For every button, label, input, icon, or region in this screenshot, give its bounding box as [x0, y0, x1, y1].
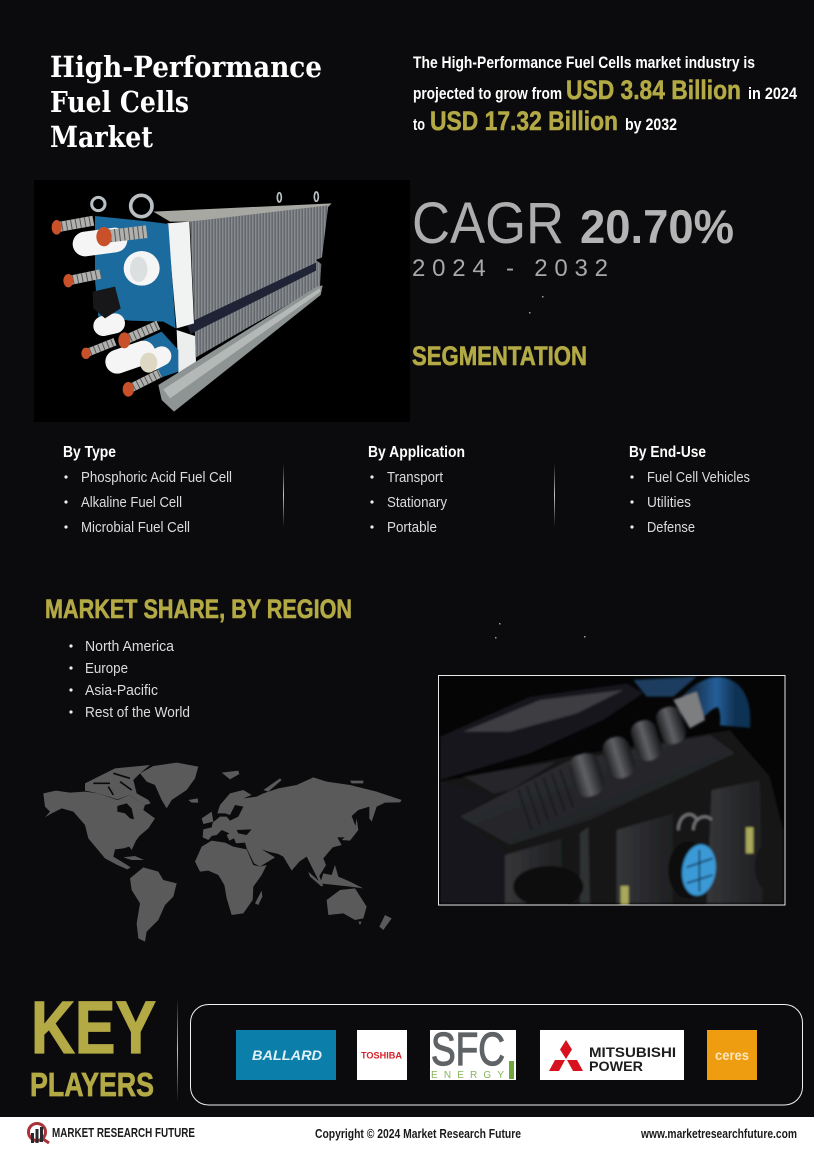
threaded rods [57, 221, 160, 389]
segment list: by end-use [629, 444, 750, 536]
africa [195, 841, 267, 915]
north america [43, 791, 155, 869]
footer: MARKET RESEARCH FUTURE [52, 1126, 195, 1140]
CAGR headline: 2024 - 2032 [412, 255, 608, 282]
logo: ballard: BALLARD [252, 1047, 322, 1063]
segment list: by type: Microbial Fuel Cell [81, 520, 190, 536]
image: fuel cell stack [34, 180, 410, 422]
CAGR headline: CAGR [412, 191, 564, 256]
region list: Rest of the World [85, 705, 190, 721]
logo: mitsubishi power: MITSUBISHI [589, 1044, 676, 1060]
segment list: by type: Phosphoric Acid Fuel Cell [81, 470, 232, 486]
segment list: by application: Transport [387, 470, 443, 486]
segment list: by application [368, 444, 465, 536]
heading: key players: KEY [31, 986, 156, 1069]
dark strap [187, 263, 316, 334]
image: fuel cell engine [438, 676, 786, 907]
world map [43, 763, 402, 942]
stack top [153, 203, 332, 222]
hose [693, 692, 735, 727]
greenland [140, 763, 198, 808]
region list: North America [85, 639, 175, 655]
base rail [158, 285, 323, 412]
upper hood [440, 683, 643, 780]
market summary text: USD 3.84 Billion [566, 75, 741, 105]
labels [746, 827, 753, 853]
iceland [222, 771, 239, 779]
segment list: by end-use: Utilities [647, 495, 691, 511]
market summary text: in 2024 [748, 85, 798, 103]
heading: key players: PLAYERS [30, 1066, 154, 1103]
title: High-Performance [50, 50, 322, 84]
arctic islands [85, 765, 151, 805]
market summary text [413, 54, 798, 136]
segment list: by type: Alkaline Fuel Cell [81, 495, 182, 511]
logo: mitsubishi power [540, 1030, 684, 1080]
lifting eyes [92, 192, 318, 217]
title [50, 50, 322, 154]
segment list: by application: By Application [368, 444, 465, 461]
blue plate [95, 216, 176, 328]
market summary text: to [413, 116, 425, 134]
segment list: by application: Portable [387, 520, 437, 536]
logo: sfc energy: SFC [431, 1023, 505, 1075]
blue cap [679, 842, 719, 898]
segment list: by end-use: By End-Use [629, 444, 706, 461]
logo: ballard [236, 1030, 336, 1080]
logo: toshiba: TOSHIBA [361, 1050, 402, 1062]
icon: market research future logo [28, 1124, 49, 1143]
islands of europe and asia [202, 812, 213, 824]
footer [0, 1117, 814, 1150]
cap and wiring [513, 866, 583, 907]
segment list: by end-use: Defense [647, 520, 695, 536]
heading: key players [30, 986, 156, 1103]
logo: ceres: ceres [715, 1048, 749, 1063]
white plates [167, 222, 194, 328]
side panels [505, 838, 563, 903]
south america [130, 867, 177, 942]
logo: toshiba [357, 1030, 407, 1080]
region list: Asia-Pacific [85, 683, 158, 699]
market summary text: The High-Performance Fuel Cells market industry is [413, 54, 755, 72]
logo: mitsubishi power: POWER [589, 1058, 643, 1074]
market summary text: by 2032 [625, 116, 677, 134]
tubes [85, 240, 162, 362]
logo: ceres [707, 1030, 757, 1080]
market summary text: projected to grow from [413, 85, 562, 103]
market summary text: USD 17.32 Billion [430, 106, 618, 136]
main body [440, 730, 783, 903]
CAGR headline: 20.70% [580, 200, 734, 253]
intake humps [566, 704, 689, 800]
eurasia [203, 777, 402, 885]
title: Market [50, 120, 154, 154]
region list [69, 639, 190, 721]
heading: market share by region: MARKET SHARE, BY REGION [45, 594, 352, 624]
black connector [93, 287, 121, 318]
specks [495, 296, 586, 638]
australia [327, 888, 367, 920]
segment list: by application: Stationary [387, 495, 448, 511]
CAGR headline [412, 191, 734, 282]
title: Fuel Cells [50, 85, 189, 119]
segment list: by type: By Type [63, 444, 116, 461]
heading: segmentation: SEGMENTATION [412, 341, 587, 371]
footer: Copyright © 2024 Market Research Future [315, 1127, 521, 1141]
cooling fins [190, 205, 328, 357]
vent ribs [518, 769, 573, 830]
region list: Europe [85, 661, 128, 677]
logo: sfc energy: ENERGY [431, 1070, 504, 1081]
segment list: by end-use: Fuel Cell Vehicles [647, 470, 750, 486]
segment list: by type [63, 444, 232, 536]
panel: key player logos [190, 1004, 802, 1105]
